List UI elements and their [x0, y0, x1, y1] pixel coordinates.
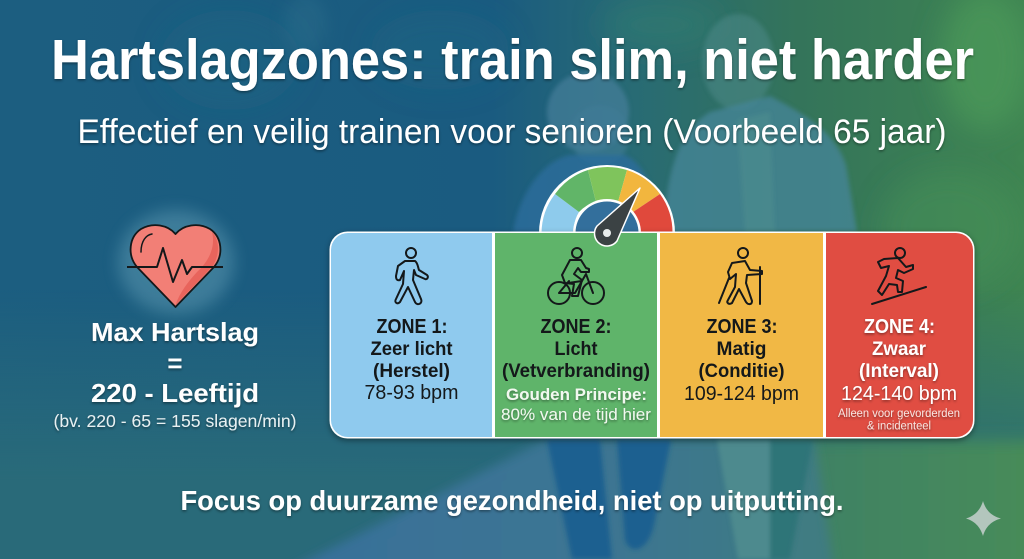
- text: zone 3: ZONE 3:: [706, 316, 778, 338]
- icon: walking person: [395, 248, 428, 304]
- panel: zone 2: [495, 233, 657, 437]
- man: [664, 14, 857, 559]
- text: zone 4: (Interval): [859, 360, 939, 382]
- woman: [513, 72, 671, 559]
- text: zone 3: Matig: [716, 338, 766, 360]
- text: zone 3: 109-124 bpm: [684, 383, 799, 405]
- panel: zone 1: [331, 233, 492, 437]
- formula: max heart rate: =: [167, 348, 183, 378]
- text: zone 4: & incidenteel: [867, 420, 931, 432]
- closing message: Focus op duurzame gezondheid, niet op uitputting.: [180, 485, 844, 516]
- text: zone 1: (Herstel): [373, 360, 450, 382]
- icon: hiker with poles: [719, 248, 762, 304]
- gauge: [539, 165, 675, 233]
- formula: max heart rate: [91, 317, 259, 408]
- text: zone 4: 124-140 bpm: [841, 383, 957, 405]
- text: zone 4: ZONE 4:: [864, 316, 935, 338]
- text: zone 3: [684, 316, 799, 405]
- icon: sparkle watermark: [966, 501, 1001, 536]
- text: zone 1: 78-93 bpm: [364, 382, 458, 404]
- panel: zones: [330, 232, 974, 438]
- text: zone 2: ZONE 2:: [540, 316, 612, 338]
- icon: runner on slope: [872, 248, 926, 304]
- text: zone 4: [838, 316, 960, 432]
- text: zone 2: (Vetverbranding): [502, 360, 650, 382]
- text: zone 4: Zwaar: [872, 338, 926, 360]
- text: zone 4: Alleen voor gevorderden: [838, 408, 960, 420]
- text: zone 2: [501, 316, 651, 424]
- formula: max heart rate: Max Hartslag: [91, 317, 259, 347]
- panel: zone 3: [660, 233, 823, 437]
- text: zone 1: ZONE 1:: [376, 316, 448, 338]
- text: zone 3: (Conditie): [698, 360, 784, 382]
- subtitle: Effectief en veilig trainen voor senioren (Voorbeeld 65 jaar): [78, 113, 946, 151]
- text: zone 2: Licht: [554, 338, 598, 360]
- formula: max heart rate: 220 - Leeftijd: [91, 378, 259, 408]
- gauge needle: [594, 188, 640, 246]
- text: zone 1: Zeer licht: [370, 338, 453, 360]
- formula example: (bv. 220 - 65 = 155 slagen/min): [54, 411, 296, 431]
- text: zone 1: [364, 316, 458, 404]
- icon: cyclist: [548, 248, 604, 304]
- text: zone 2: Gouden Principe:: [506, 385, 647, 404]
- panel: zone 4: [826, 233, 973, 437]
- icon: heart with pulse line: [118, 210, 234, 314]
- text: zone 2: 80% van de tijd hier: [501, 405, 651, 424]
